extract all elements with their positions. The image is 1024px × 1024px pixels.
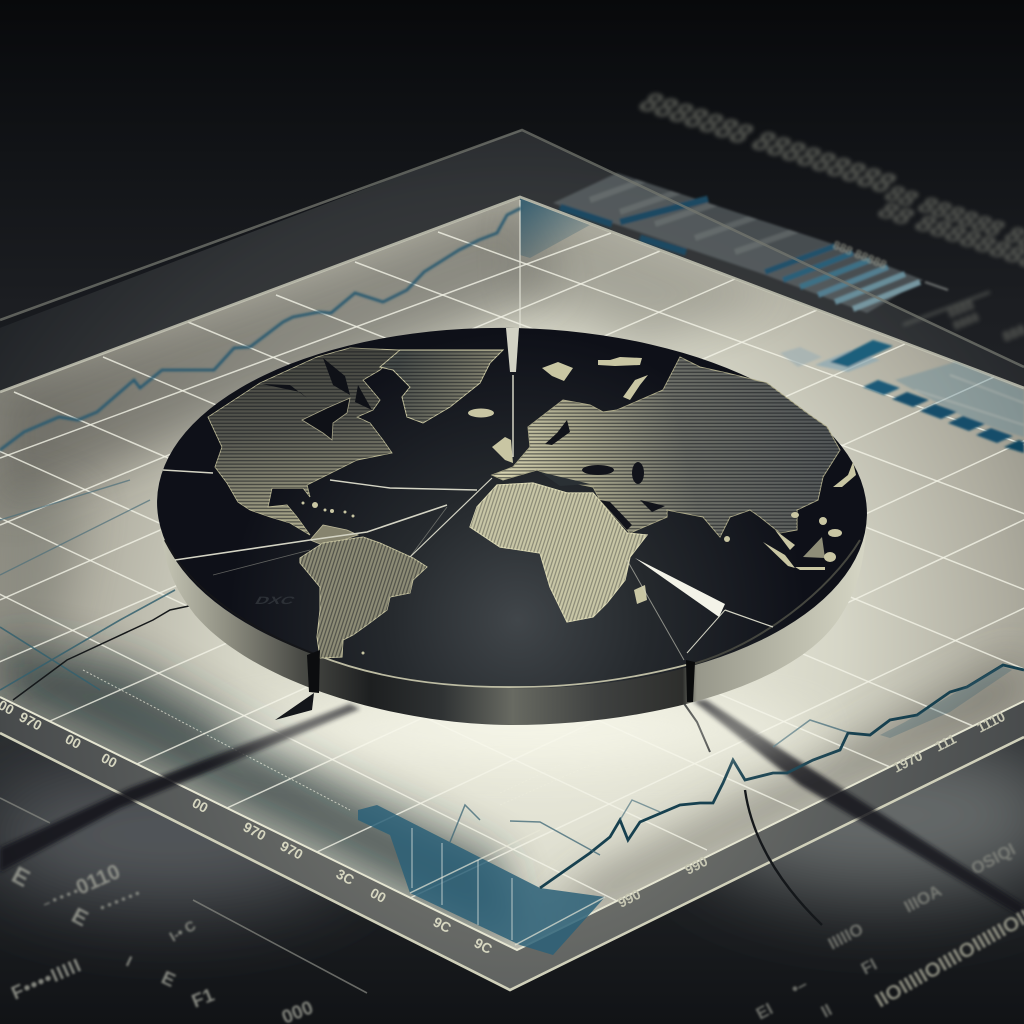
disc edge <box>158 505 867 725</box>
data table: bottom left <box>7 860 316 1024</box>
axis tick labels along bottom-left edge: 970 <box>17 709 45 734</box>
crack wedge: right <box>635 558 725 617</box>
axis tick labels along bottom-left edge: 00 <box>368 885 389 906</box>
data table: bottom right: •– <box>788 975 810 999</box>
axis tick labels along bottom-left edge: 00 <box>63 731 84 752</box>
disc <box>153 321 871 725</box>
data table: top right <box>631 86 1024 345</box>
data table: top right: 88 88888888 <box>871 198 1024 273</box>
axis tick labels along bottom-left edge: 9C <box>472 935 495 957</box>
data table: bottom right: EI <box>753 999 776 1024</box>
axis tick labels along bottom-left edge: 9C <box>431 914 454 936</box>
table labels above blue bars: 888 88888 <box>831 238 889 272</box>
data table: bottom left: • • • • • • <box>98 886 142 915</box>
glow under disc <box>220 702 820 758</box>
axis tick labels along bottom-right edge: 1110 <box>974 708 1008 736</box>
disc top face <box>153 321 871 695</box>
background lights <box>0 735 1024 905</box>
inland seas <box>540 420 665 530</box>
continent: North America <box>208 348 400 535</box>
chart: blue bars right <box>780 340 1024 453</box>
continent: Eurasia <box>492 357 840 537</box>
shadows cast by cracks <box>0 700 1024 925</box>
axis tick labels along bottom-left edge: 00 <box>99 750 120 771</box>
islands <box>302 357 856 654</box>
shard shadow <box>275 693 314 720</box>
data table: bottom right: IIOIIIIIOIIIIOIIIIIIOII <box>872 906 1024 1012</box>
data table: bottom left: E <box>158 967 178 992</box>
crack wedge: top <box>506 328 519 372</box>
axis tick labels along bottom-left edge <box>0 697 495 957</box>
chart: rising blue line top left <box>0 208 521 450</box>
axis tick labels along bottom-left edge: 3C <box>334 866 357 888</box>
rim highlight <box>317 655 690 687</box>
faint disc label: DXC <box>252 595 297 607</box>
crack notch: left rim <box>307 650 320 693</box>
data table: bottom left: F1 <box>189 985 218 1013</box>
data table: bottom right: OSIQI <box>968 840 1019 879</box>
data table: bottom left: E <box>68 902 92 931</box>
data table: bottom right: IIIIIO <box>825 919 866 954</box>
axis tick labels along bottom-right edge <box>615 708 1008 911</box>
data table: bottom left: I <box>123 953 134 970</box>
top band shading <box>0 130 1024 392</box>
data table: top right: 8888888 888888888 <box>631 86 905 199</box>
chart: blue bars bottom <box>358 805 605 955</box>
data table: bottom right: FI <box>858 955 880 979</box>
inner chart sheet with grid <box>0 198 1024 950</box>
arctic gaps <box>262 358 372 410</box>
axis tick labels along bottom-right edge: 1970 <box>890 747 925 776</box>
axis tick labels along bottom-left edge: 00 <box>190 795 211 816</box>
continent: central south link <box>310 525 358 546</box>
data table: top right: 8888 <box>951 310 981 333</box>
chart: rising line bottom right <box>450 665 1024 888</box>
top band table <box>553 173 948 313</box>
inland: Hudson Bay <box>302 398 350 440</box>
data table: top right: 8888 <box>946 298 976 321</box>
data table: bottom right: II <box>818 1000 835 1022</box>
data table: bottom left: 0110 <box>73 860 124 900</box>
data table: bottom left: F••••IIIII <box>8 955 85 1005</box>
chart: blue lines left <box>0 480 590 810</box>
continent: South America <box>300 537 427 658</box>
axis tick labels along bottom-left edge: 970 <box>278 838 306 863</box>
axis tick labels along bottom-right edge: 990 <box>615 886 643 911</box>
data table: bottom right <box>753 840 1024 1024</box>
axis tick labels along bottom-right edge: 111 <box>932 730 959 755</box>
data table: bottom left: I-• C <box>166 917 198 945</box>
data table: bottom left: – • • • • <box>41 884 80 911</box>
axis tick labels along bottom-right edge: 990 <box>682 853 710 878</box>
crack notch: right rim <box>686 660 695 702</box>
cracks <box>163 375 773 660</box>
continent: Africa <box>470 483 647 622</box>
axis tick labels along bottom-left edge: 970 <box>241 819 269 844</box>
data table: bottom right: IIIOA <box>901 881 945 917</box>
continent: Greenland <box>380 350 503 423</box>
data table: bottom left: E <box>7 861 34 893</box>
